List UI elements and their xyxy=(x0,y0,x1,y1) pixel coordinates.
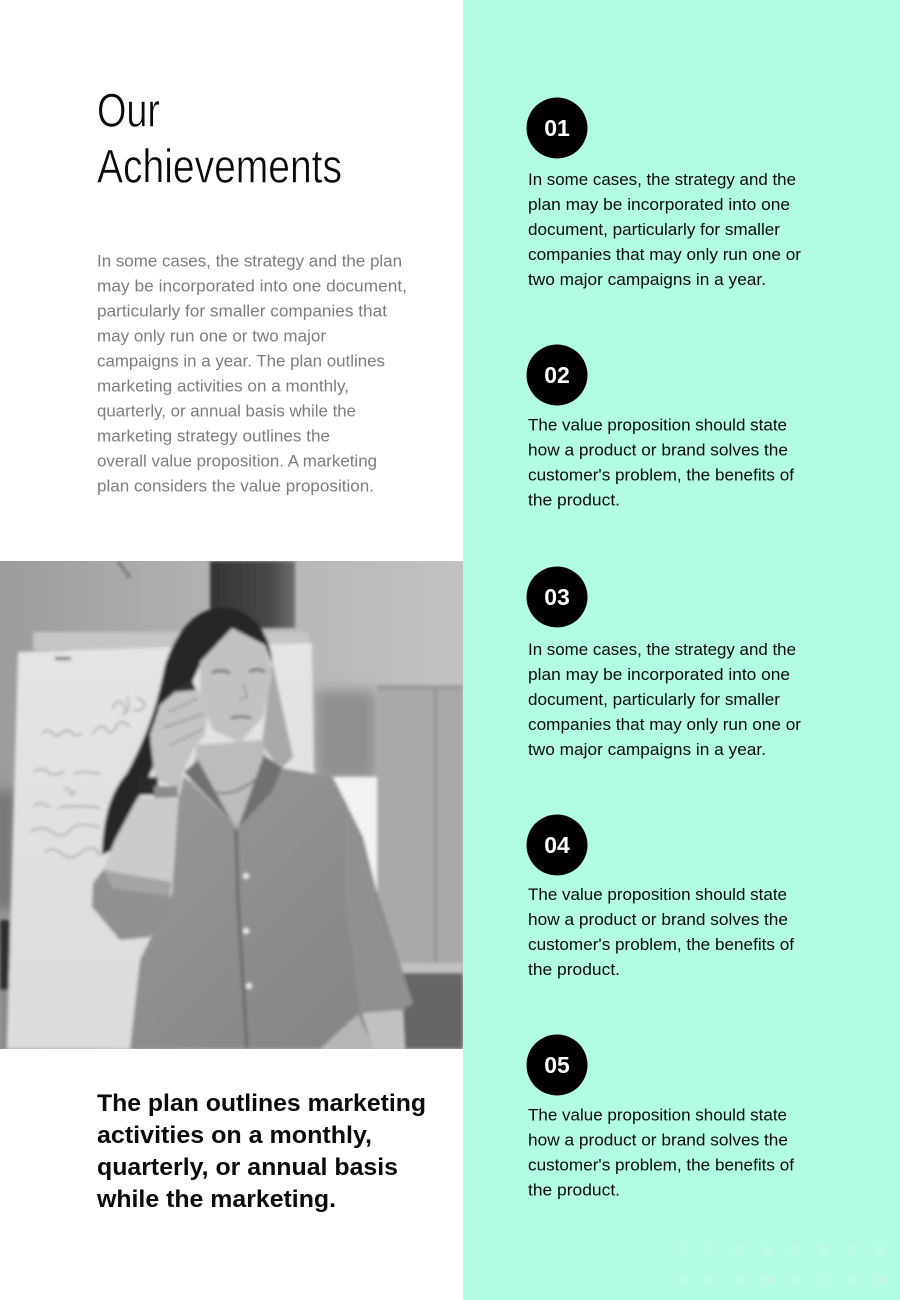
item 04 text: The value proposition should state xyxy=(528,886,787,904)
item 04 text: customer's problem, the benefits of xyxy=(528,936,794,954)
intro paragraph: In some cases, the strategy and the plan xyxy=(97,252,402,270)
intro paragraph: may only run one or two major xyxy=(97,328,327,346)
item 05 text: The value proposition should state xyxy=(528,1106,787,1124)
number badge 04: 04 xyxy=(544,832,570,858)
item 03 text xyxy=(528,641,802,759)
item 03 xyxy=(526,566,802,759)
item 02 text: how a product or brand solves the xyxy=(528,442,788,460)
intro paragraph: marketing activities on a monthly, xyxy=(97,378,349,396)
callout: bold statement: quarterly, or annual basis xyxy=(97,1154,398,1181)
item 01 xyxy=(526,98,802,289)
intro paragraph: marketing strategy outlines the xyxy=(97,428,330,446)
number badge 03 xyxy=(526,566,588,628)
number badge 02: 02 xyxy=(544,362,570,388)
item 04 xyxy=(526,814,794,979)
callout: bold statement xyxy=(96,1090,426,1213)
intro paragraph: campaigns in a year. The plan outlines xyxy=(97,352,385,370)
intro paragraph: plan considers the value proposition. xyxy=(97,478,374,496)
intro paragraph: particularly for smaller companies that xyxy=(97,302,387,320)
intro paragraph: quarterly, or annual basis while the xyxy=(97,402,356,420)
item 04 text: how a product or brand solves the xyxy=(528,911,788,929)
photo: woman on the phone in front of a flip chart xyxy=(0,561,463,1049)
item 02 text: customer's problem, the benefits of xyxy=(528,466,794,484)
intro paragraph: overall value proposition. A marketing xyxy=(97,452,377,470)
callout: bold statement: The plan outlines marketing xyxy=(97,1090,426,1117)
number badge 03: 03 xyxy=(544,584,570,610)
item 05 text xyxy=(528,1106,794,1200)
item 03 text: document, particularly for smaller xyxy=(528,691,781,709)
item 02 text xyxy=(528,416,794,510)
callout: bold statement: activities on a monthly, xyxy=(97,1122,372,1149)
item 01 text xyxy=(528,171,802,289)
intro paragraph: may be incorporated into one document, xyxy=(97,278,407,296)
item 05 text: customer's problem, the benefits of xyxy=(528,1156,794,1174)
item 03 text: plan may be incorporated into one xyxy=(528,666,790,684)
item 01 text: In some cases, the strategy and the xyxy=(528,171,796,189)
title: Achievements xyxy=(97,140,342,192)
item 05 text: how a product or brand solves the xyxy=(528,1132,788,1150)
item 04 text: the product. xyxy=(528,961,620,979)
number badge 01: 01 xyxy=(544,115,570,141)
item 03 text: companies that may only run one or xyxy=(528,716,802,734)
title: Our xyxy=(97,84,160,136)
number badge 04 xyxy=(526,814,588,876)
item 02 text: The value proposition should state xyxy=(528,416,787,434)
callout: bold statement: while the marketing. xyxy=(96,1186,336,1213)
item 03 text: two major campaigns in a year. xyxy=(528,741,766,759)
item 04 text xyxy=(528,886,794,979)
number badge 02 xyxy=(526,344,588,406)
panel: mint background xyxy=(463,0,900,1300)
number badge 05 xyxy=(526,1034,588,1096)
title xyxy=(97,84,342,192)
item 01 text: plan may be incorporated into one xyxy=(528,196,790,214)
item 02 xyxy=(526,344,794,510)
item 01 text: two major campaigns in a year. xyxy=(528,271,766,289)
item 03 text: In some cases, the strategy and the xyxy=(528,641,796,659)
item 05 xyxy=(526,1034,794,1200)
intro paragraph xyxy=(97,252,407,496)
number badge 05: 05 xyxy=(544,1052,570,1078)
item 05 text: the product. xyxy=(528,1182,620,1200)
item 01 text: companies that may only run one or xyxy=(528,246,802,264)
number badge 01 xyxy=(526,98,588,158)
item 02 text: the product. xyxy=(528,492,620,510)
item 01 text: document, particularly for smaller xyxy=(528,221,781,239)
